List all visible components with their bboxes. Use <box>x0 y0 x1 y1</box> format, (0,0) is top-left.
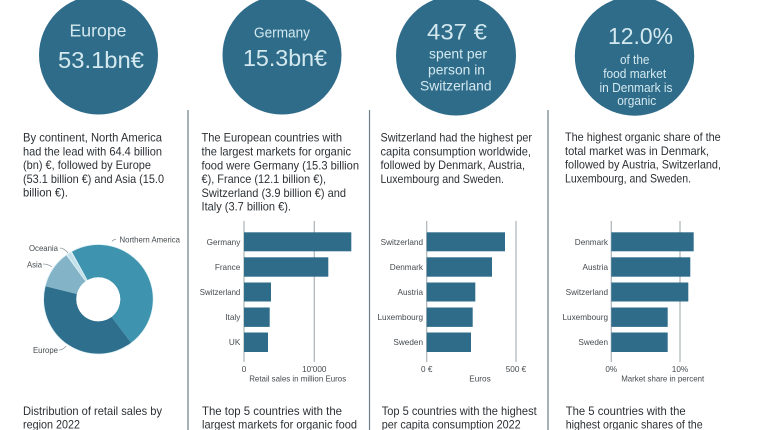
caption: distribution: Distribution of retail sales by <box>23 405 162 418</box>
donut chart: retail sales by region: Oceania <box>29 244 58 253</box>
circle: 12.0% organic share: of the <box>620 53 649 67</box>
circle: 437 € per person: 437 € <box>427 20 487 44</box>
bar chart: retail sales by country <box>200 221 351 384</box>
text block: European markets: Italy (3.7 billion €). <box>202 201 291 214</box>
bar chart: market share: 10% <box>672 365 688 374</box>
circle: 12.0% organic share <box>575 0 694 116</box>
bar chart: per capita consumption: Austria <box>398 288 423 297</box>
bar chart: market share: Austria <box>583 263 608 272</box>
bar chart: market share: 0% <box>605 365 617 374</box>
bar chart: per capita consumption: Switzerland <box>381 238 423 247</box>
bar chart: market share: Market share in percent <box>621 374 705 384</box>
circle: Germany 15.3bn€: 15.3bn€ <box>243 45 327 71</box>
circle: Europe 53.1bn€: 53.1bn€ <box>58 47 144 73</box>
circle: 12.0% organic share: 12.0% <box>608 23 673 49</box>
panel: Switzerland <box>377 0 540 430</box>
text block: per capita consumption: Luxembourg and Sweden. <box>380 173 504 186</box>
circle: Europe 53.1bn€ <box>39 0 158 114</box>
bar chart: market share: Switzerland <box>566 288 608 297</box>
text block: continent summary: had the lead with 64.4 billion <box>23 145 162 158</box>
circle: Europe 53.1bn€: Europe <box>70 20 126 40</box>
circle: 437 € per person <box>396 0 516 116</box>
caption: top 5 markets: The top 5 countries with the <box>202 405 342 418</box>
bar chart: per capita consumption: 0 € <box>421 365 433 374</box>
bar chart: per capita consumption: Luxembourg <box>377 313 423 322</box>
bar chart: retail sales by country: Germany <box>207 238 241 247</box>
text block: per capita consumption: Switzerland had the highest per <box>380 132 532 144</box>
bar chart: market share: Denmark <box>575 238 609 247</box>
circle: Germany 15.3bn€ <box>222 0 342 114</box>
circle: 12.0% organic share: organic <box>617 94 656 108</box>
bar chart: market share: Sweden <box>578 338 608 347</box>
bar chart: market share: Luxembourg <box>562 313 608 322</box>
donut chart: retail sales by region: Asia <box>27 260 42 269</box>
text block: organic share: followed by Austria, Switzerland, <box>565 159 721 172</box>
text block: European markets: food were Germany (15.3 billion <box>202 159 359 172</box>
text block: European markets: The European countries with <box>202 132 342 144</box>
text block: organic share: Luxembourg, and Sweden. <box>565 172 691 185</box>
panel: Germany <box>200 0 362 430</box>
bar chart: retail sales by country: Italy <box>225 313 241 322</box>
bar chart: per capita consumption <box>377 221 527 384</box>
text block: continent summary: (53.1 billion €) and Asia (15.0 <box>23 173 164 186</box>
text block: continent summary: (bn) €, followed by Europe <box>23 159 151 172</box>
circle: 437 € per person: person in <box>428 61 485 77</box>
bar chart: retail sales by country: 0 <box>242 365 247 374</box>
text block: per capita consumption: capita consumption worldwide, <box>380 145 531 158</box>
bar chart: retail sales by country: 10'000 <box>302 365 327 374</box>
bar chart: per capita consumption: Sweden <box>393 338 423 347</box>
bar chart: per capita consumption: Denmark <box>390 263 424 272</box>
donut chart: retail sales by region <box>27 236 180 355</box>
text block: organic share: total market was in Denmark, <box>565 145 709 158</box>
circle: 437 € per person: spent per <box>429 45 487 61</box>
bar chart: per capita consumption: Euros <box>469 374 491 384</box>
donut chart: retail sales by region: Europe <box>33 346 58 355</box>
text block: per capita consumption: followed by Denmark, Austria, <box>380 159 525 172</box>
bar chart: retail sales by country: Retail sales in million Euros <box>249 374 346 384</box>
text block: European markets: the largest markets for organic <box>202 146 351 158</box>
text block: European markets: Switzerland (3.9 billion €) and <box>202 187 346 200</box>
bar chart: retail sales by country: UK <box>229 338 241 347</box>
bar chart: retail sales by country: Switzerland <box>200 288 241 297</box>
circle: 12.0% organic share: food market <box>603 67 667 81</box>
bar chart: retail sales by country: France <box>215 263 241 272</box>
circle: 12.0% organic share: in Denmark is <box>600 81 672 95</box>
caption: top 5 organic shares: The 5 countries with the <box>566 405 686 418</box>
text block: European markets: €), France (12.1 billion €), <box>202 173 326 186</box>
panel: Europe <box>23 0 180 430</box>
text block: organic share: The highest organic share of the <box>565 131 721 144</box>
bar chart: per capita consumption: 500 € <box>506 365 527 374</box>
panel: Denmark <box>562 0 724 430</box>
text block: continent summary: billion €). <box>23 187 68 200</box>
caption: top 5 per capita: Top 5 countries with the highest <box>382 405 537 418</box>
bar chart: market share <box>562 221 705 384</box>
circle: Germany 15.3bn€: Germany <box>254 26 311 42</box>
text block: continent summary: By continent, North America <box>23 132 163 144</box>
circle: 437 € per person: Switzerland <box>420 77 492 93</box>
donut chart: retail sales by region: Northern America <box>120 236 180 244</box>
